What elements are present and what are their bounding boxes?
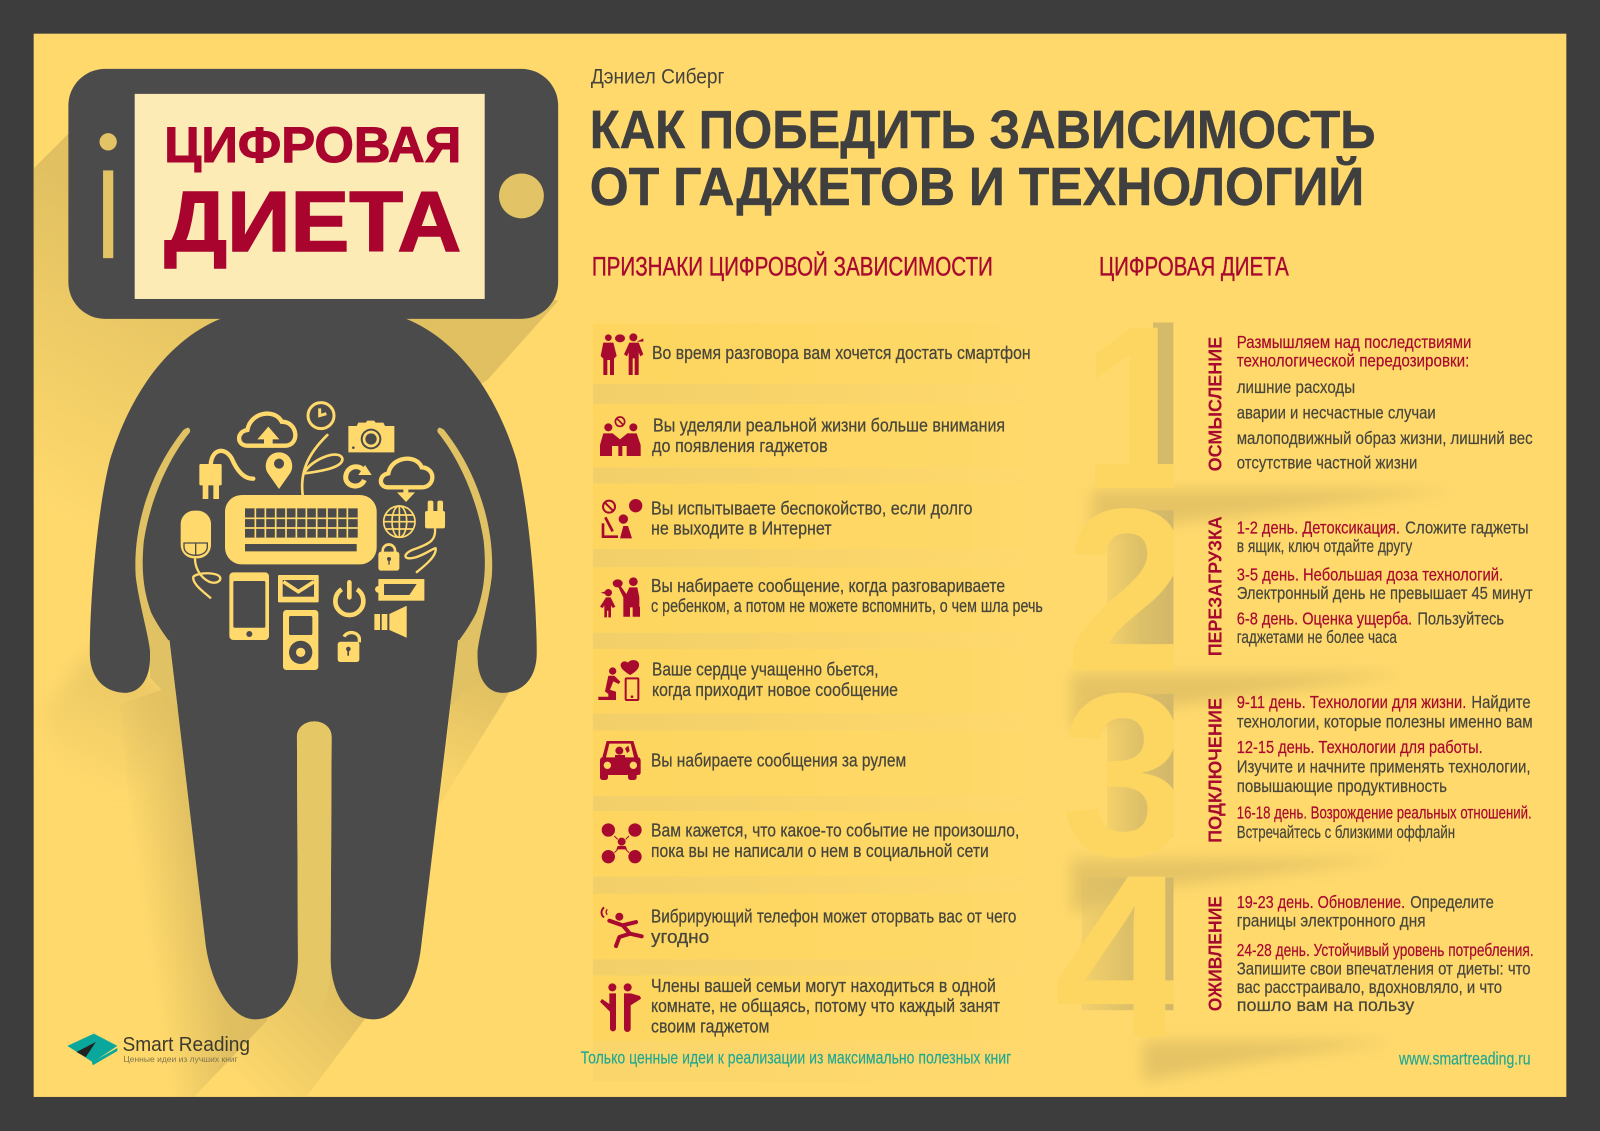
step text: [1237, 692, 1533, 842]
row 4: messaging with a child: Вы набираете сообщение, когда разговариваете: [651, 575, 1005, 596]
icon: two people with gadgets: [600, 983, 641, 1032]
row 5: heart beats at new message: [598, 659, 898, 700]
main title: КАК ПОБЕДИТЬ ЗАВИСИМОСТЬ: [590, 101, 1376, 160]
step text: технологической передозировки:: [1237, 350, 1469, 370]
icon: two people at a table: [600, 417, 641, 456]
row 7: social networks: Вам кажется, что какое-то событие не произошло,: [651, 820, 1019, 841]
heading: diet: ЦИФРОВАЯ ДИЕТА: [1099, 252, 1289, 282]
step text: 1-2 день. Детоксикация.: [1237, 518, 1400, 538]
step text: Электронный день не превышает 45 минут: [1237, 583, 1533, 603]
step text: Пользуйтесь: [1417, 608, 1504, 628]
icon: mouse: [181, 511, 220, 598]
icon: right plug: [405, 501, 445, 573]
icon: smartphone: [229, 572, 269, 640]
step label: ОСМЫСЛЕНИЕ: [1204, 337, 1225, 471]
icon: battery: [375, 579, 424, 601]
author: Дэниел Сиберг: [591, 65, 725, 89]
icon: two people talking: [601, 333, 643, 375]
digit 3: [1066, 692, 1174, 852]
step text: лишние расходы: [1237, 377, 1355, 397]
row 3: anxiety without internet: Вы испытываете беспокойство, если долго: [651, 497, 972, 518]
step text: 19-23 день. Обновление.: [1237, 892, 1405, 912]
footer slogan: Только ценные идеи к реализации из максимально полезных книг: [581, 1047, 1011, 1067]
icon: left plug: [199, 451, 253, 499]
digit 4: [1058, 876, 1174, 1036]
phone headline: ЦИФРОВАЯ: [164, 117, 461, 173]
row backgrounds: [593, 323, 1042, 1082]
icon: speaker: [374, 606, 407, 638]
step text: отсутствие частной жизни: [1237, 452, 1417, 472]
icon: download cloud: [381, 459, 432, 502]
row 1: smartphone in conversation: Во время разговора вам хочется достать смартфон: [652, 342, 1031, 363]
gap left of torso: [135, 428, 190, 707]
row 4: messaging with a child: [600, 575, 1043, 617]
row 8: vibrating phone: [602, 905, 1016, 947]
step text: 6-8 день. Оценка ущерба.: [1237, 608, 1412, 628]
figure long shadows: [34, 133, 558, 1097]
row 6: texting while driving: [600, 741, 906, 780]
step shadows: [1071, 490, 1459, 1082]
digit 3: 3: [1061, 645, 1188, 905]
row 9: family in one room: комнате, не общаясь, потому что каждый занят: [651, 995, 1000, 1016]
step text: пошло вам на пользу: [1237, 995, 1414, 1015]
icon: kneeling person with hearts and phone: [598, 660, 639, 700]
icon: camera: [348, 421, 394, 452]
icon: car: [600, 741, 641, 780]
step 3: подключение: [1061, 645, 1533, 905]
icon: book: [67, 1034, 117, 1065]
row 4: messaging with a child: с ребенком, а потом не можете вспомнить, о чем шла речь: [651, 595, 1043, 616]
main title: ОТ ГАДЖЕТОВ И ТЕХНОЛОГИЙ: [590, 156, 1364, 217]
icon: map pin: [266, 452, 292, 489]
speaker dot and slot: [99, 133, 117, 258]
phone head: [68, 69, 558, 319]
step text: 12-15 день. Технологии для работы.: [1237, 737, 1483, 757]
row 3: anxiety without internet: не выходите в Интернет: [651, 518, 832, 539]
main title: [590, 101, 1376, 217]
icon: anxious person: [603, 499, 642, 538]
row 9: family in one room: своим гаджетом: [651, 1016, 769, 1037]
step text: Изучите и начните применять технологии,: [1237, 756, 1531, 776]
row 5: heart beats at new message: Ваше сердце учащенно бьется,: [652, 659, 879, 680]
phone headline: [164, 117, 461, 270]
phone screen: [135, 94, 485, 299]
gadget icons on belly: [181, 403, 445, 670]
step text: Встречайтесь с близкими оффлайн: [1237, 822, 1455, 842]
step 4: оживление: [1058, 876, 1532, 1036]
gap between legs: [297, 721, 332, 1015]
logo: Smart Reading: Ценные идеи из лучших книг: [123, 1054, 238, 1064]
step text: [1237, 892, 1534, 1015]
icon: adult and child: [600, 577, 640, 617]
logo: Smart Reading: Smart Reading: [122, 1034, 250, 1056]
logo: Smart Reading: [67, 1034, 250, 1065]
heading: signs: ПРИЗНАКИ ЦИФРОВОЙ ЗАВИСИМОСТИ: [592, 252, 993, 282]
digit 2: [1073, 508, 1174, 670]
footer url: www.smartreading.ru: [1398, 1048, 1531, 1068]
icon: keyboard: [225, 495, 377, 564]
step text: [1237, 518, 1533, 647]
step 1: осмысление: [1082, 278, 1533, 538]
icon: upload cloud: [239, 414, 295, 447]
step text: в ящик, ключ отдайте другу: [1237, 536, 1412, 556]
row 3: anxiety without internet: [603, 497, 972, 539]
row 8: vibrating phone: угодно: [651, 926, 709, 947]
row 2: real life before gadgets: Вы уделяли реальной жизни больше внимания: [653, 415, 1005, 436]
icon: closed lock: [378, 545, 399, 571]
step text: Сложите гаджеты: [1405, 518, 1529, 538]
icon: envelope: [278, 575, 319, 602]
step 2: перезагрузка: [1065, 460, 1533, 720]
row 6: texting while driving: Вы набираете сообщения за рулем: [651, 749, 906, 770]
step text: вас расстраивало, вдохновляло, и что: [1237, 977, 1502, 997]
row 2: real life before gadgets: [600, 415, 1005, 456]
step text: границы электронного дня: [1237, 911, 1426, 931]
icon: open lock: [338, 633, 359, 662]
digit 4: 4: [1054, 827, 1189, 1087]
icon: running person: [602, 907, 642, 946]
figure: phone-headed person: [68, 69, 558, 1019]
step text: Определите: [1410, 892, 1494, 912]
icon: globe: [384, 506, 415, 537]
step text: [1237, 332, 1533, 472]
row 9: family in one room: Члены вашей семьи могут находиться в одной: [651, 975, 996, 996]
row 8: vibrating phone: Вибрирующий телефон может оторвать вас от чего: [651, 905, 1016, 926]
step label: ОЖИВЛЕНИЕ: [1204, 896, 1225, 1011]
step label: ПОДКЛЮЧЕНИЕ: [1204, 698, 1225, 843]
step text: Запишите свои впечатления от диеты: что: [1237, 958, 1531, 978]
home button: [499, 173, 544, 218]
row 2: real life before gadgets: до появления гаджетов: [652, 435, 828, 456]
step text: гаджетами не более часа: [1237, 627, 1397, 647]
body silhouette: [90, 318, 537, 1019]
row 1: smartphone in conversation: [601, 333, 1031, 375]
icon: power: [335, 582, 363, 615]
digit 1: [1094, 322, 1174, 486]
step text: 9-11 день. Технологии для жизни.: [1237, 692, 1466, 712]
icon: social network person: [602, 823, 642, 863]
gap right of torso: [437, 428, 492, 707]
icon: music player: [283, 610, 318, 670]
row 7: social networks: пока вы не написали о нем в социальной сети: [651, 840, 989, 861]
step label: ПЕРЕЗАГРУЗКА: [1204, 516, 1225, 656]
digit 1: 1: [1082, 278, 1196, 538]
step text: Найдите: [1471, 692, 1531, 712]
icon: keyboard cable: [302, 435, 342, 495]
step text: малоподвижный образ жизни, лишний вес: [1237, 428, 1533, 448]
step text: Размышляем над последствиями: [1237, 332, 1471, 352]
phone headline: ДИЕТА: [164, 174, 461, 270]
step text: 3-5 день. Небольшая доза технологий.: [1237, 565, 1503, 585]
row 7: social networks: [602, 820, 1019, 863]
step text: технологии, которые полезны именно вам: [1237, 712, 1533, 732]
step text: повышающие продуктивность: [1237, 776, 1447, 796]
row 5: heart beats at new message: когда приходит новое сообщение: [652, 679, 898, 700]
row 9: family in one room: [600, 975, 1000, 1037]
step text: аварии и несчастные случаи: [1237, 402, 1436, 422]
digit 2: 2: [1065, 460, 1190, 720]
icon: clock: [308, 403, 334, 429]
icon: refresh arrow: [346, 465, 372, 486]
